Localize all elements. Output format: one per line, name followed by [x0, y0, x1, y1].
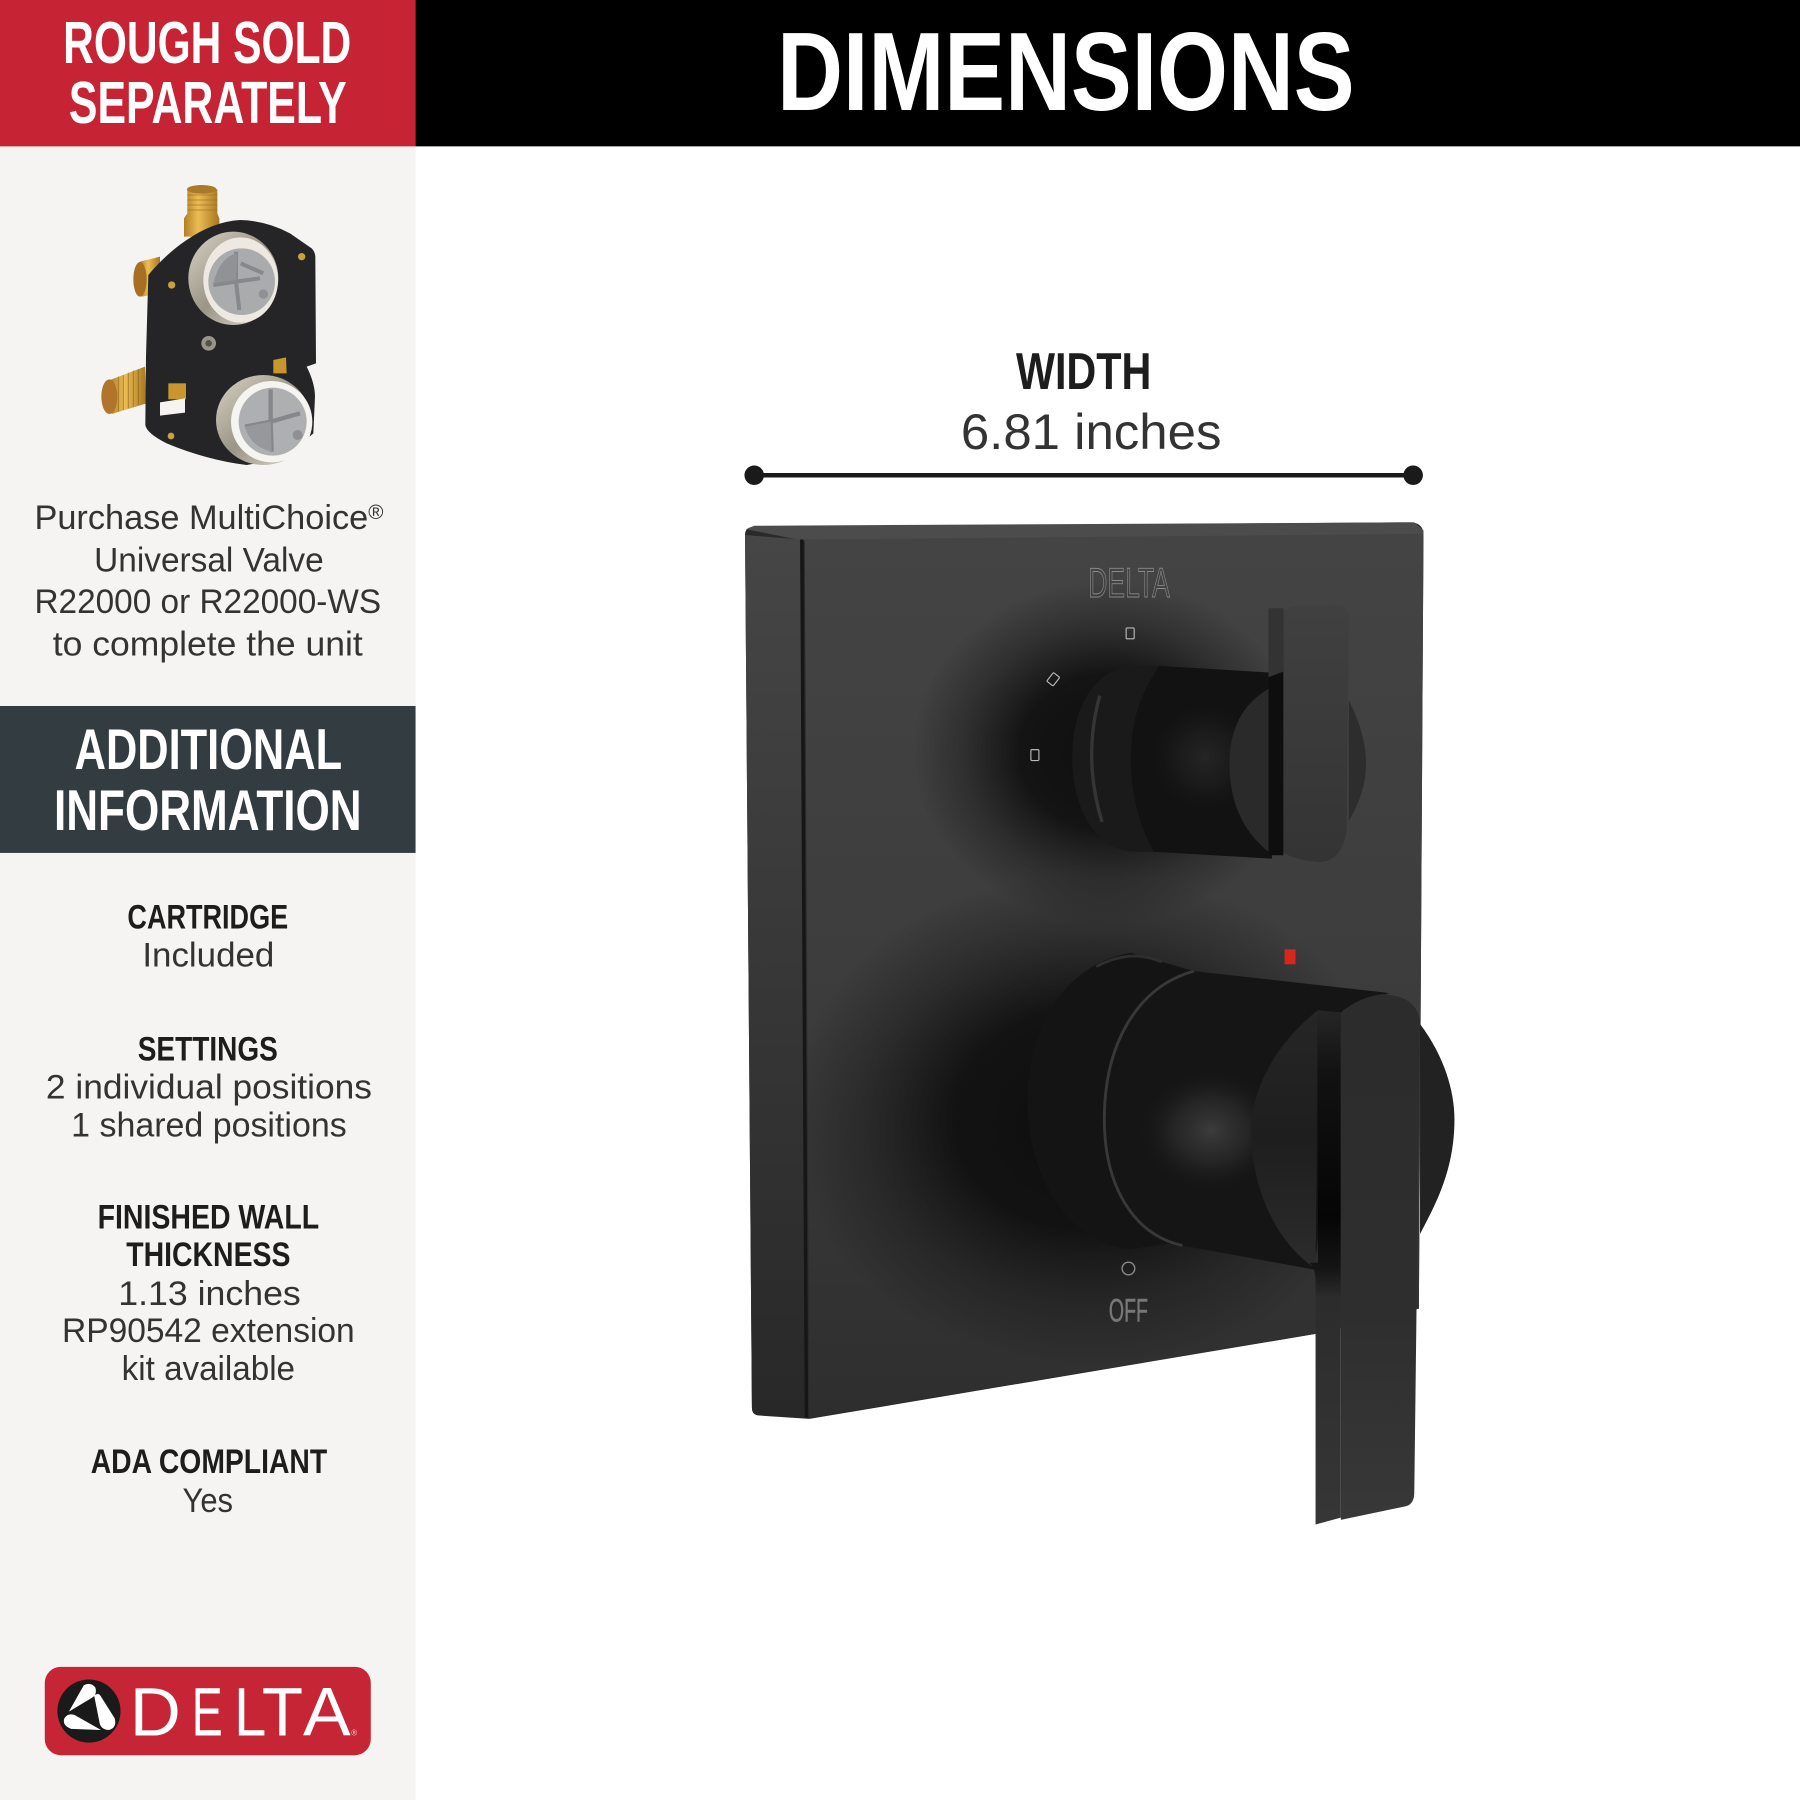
faceplate	[745, 522, 1423, 1419]
heading: additional information: INFORMATION	[54, 779, 362, 843]
mounting plate	[145, 220, 316, 465]
title banner: dimensions: DIMENSIONS	[777, 9, 1355, 134]
title banner: dimensions	[416, 0, 1800, 146]
logo: delta: L	[234, 1674, 266, 1751]
red temperature mark	[1285, 949, 1295, 964]
spec: finished wall thickness: kit available	[122, 1350, 295, 1388]
spec: settings: 2 individual positions	[46, 1069, 372, 1107]
lower temperature knob	[1027, 953, 1454, 1524]
text block: purchase note: to complete the unit	[53, 625, 363, 663]
arrow: width dimension line	[744, 465, 1423, 485]
text block: purchase note: Universal Valve	[94, 542, 324, 580]
position markers	[1031, 628, 1134, 761]
spec: cartridge: CARTRIDGE	[127, 899, 288, 937]
logo: delta: T	[262, 1674, 303, 1751]
spec: finished wall thickness	[62, 1198, 355, 1388]
banner: rough sold separately: SEPARATELY	[69, 69, 347, 136]
spec: settings: 1 shared positions	[71, 1106, 347, 1144]
spec: ada compliant	[91, 1443, 327, 1520]
spec: finished wall thickness: RP90542 extension	[62, 1312, 355, 1350]
banner: rough sold separately: ROUGH SOLD	[63, 9, 351, 76]
upper valve port	[188, 232, 278, 325]
product: shower valve trim	[745, 522, 1454, 1524]
heading: additional information: ADDITIONAL	[75, 718, 342, 782]
logo: delta	[45, 1667, 371, 1755]
text block: purchase note: R22000 or R22000-WS	[34, 583, 381, 621]
logo: delta: E	[192, 1674, 223, 1751]
text block: purchase note: Purchase MultiChoice	[34, 499, 369, 537]
spec: ada compliant: ADA COMPLIANT	[91, 1443, 327, 1481]
banner: rough sold separately	[0, 0, 416, 146]
spec: cartridge: Included	[142, 937, 274, 975]
spec: finished wall thickness: FINISHED WALL	[98, 1198, 319, 1236]
spec: finished wall thickness: 1.13 inches	[118, 1275, 301, 1313]
spec: settings: SETTINGS	[138, 1031, 278, 1069]
lower valve port	[216, 375, 311, 465]
logo: delta: D	[130, 1674, 181, 1751]
spec: ada compliant: Yes	[183, 1482, 233, 1520]
icon: rough-in valve	[101, 185, 316, 465]
upper diverter knob	[1072, 605, 1366, 862]
dimension label: width	[961, 342, 1221, 460]
dimension label: width: WIDTH	[1016, 342, 1151, 400]
spec: finished wall thickness: THICKNESS	[126, 1236, 290, 1274]
panel: sidebar background	[0, 146, 416, 1800]
engraved off mark: OFF	[1109, 1292, 1148, 1328]
logo: delta: A	[303, 1674, 351, 1751]
text block: purchase note: ®	[368, 501, 383, 524]
dimension label: width: 6.81 inches	[961, 403, 1221, 460]
engraved delta mark: DELTA	[1088, 560, 1170, 606]
text block: purchase note	[34, 499, 383, 663]
icon: engraved symbol	[1122, 1262, 1135, 1275]
heading: additional information	[0, 706, 416, 853]
spec: settings	[46, 1031, 372, 1144]
spec: cartridge	[127, 899, 288, 975]
logo: delta: ®	[351, 1729, 357, 1738]
